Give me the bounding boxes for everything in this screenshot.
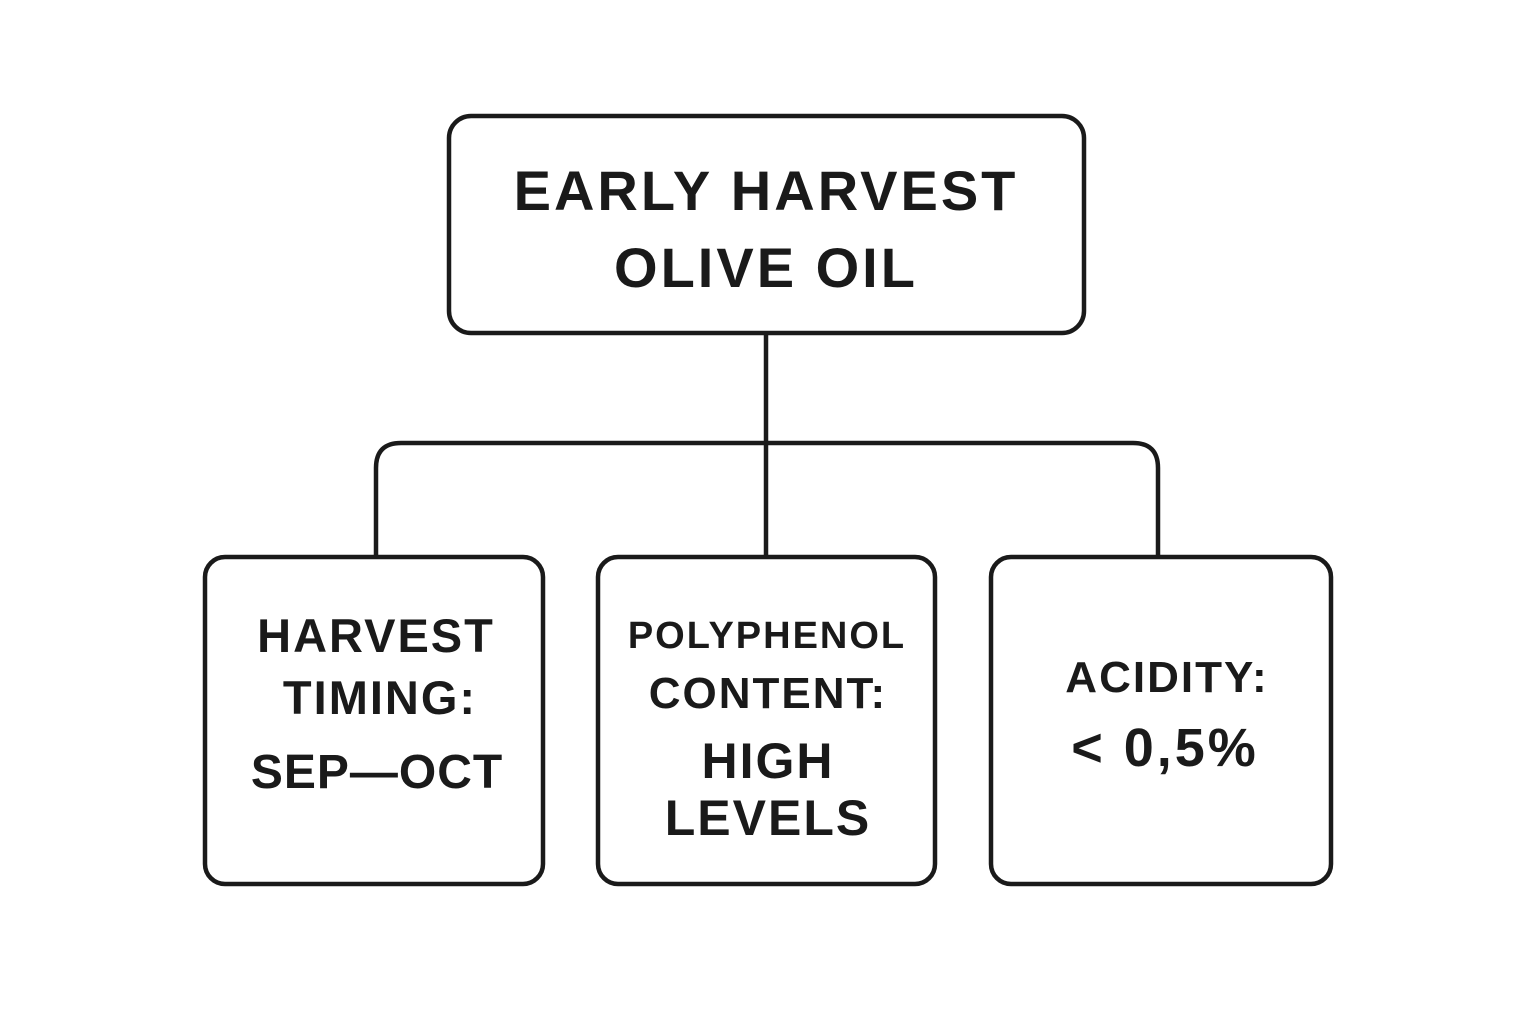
panel: polyphenol content [598,557,935,884]
panel: acidity: < 0,5% [1071,718,1259,778]
panel: acidity [991,557,1331,884]
panel: harvest timing: TIMING: [283,671,477,724]
panel: polyphenol content: CONTENT: [649,669,887,718]
panel: harvest timing [205,557,543,884]
panel: polyphenol content: LEVELS [665,790,871,846]
panel: harvest timing: SEP—OCT [251,746,503,799]
connector lines [376,333,1158,556]
title [514,159,1018,299]
panel: polyphenol content: POLYPHENOL [628,615,906,657]
panel: harvest timing: HARVEST [257,609,495,662]
panel: acidity: ACIDITY: [1065,653,1269,702]
title box [449,116,1084,333]
panel: polyphenol content: HIGH [702,733,834,789]
title: OLIVE OIL [614,236,918,299]
title: EARLY HARVEST [514,159,1018,222]
